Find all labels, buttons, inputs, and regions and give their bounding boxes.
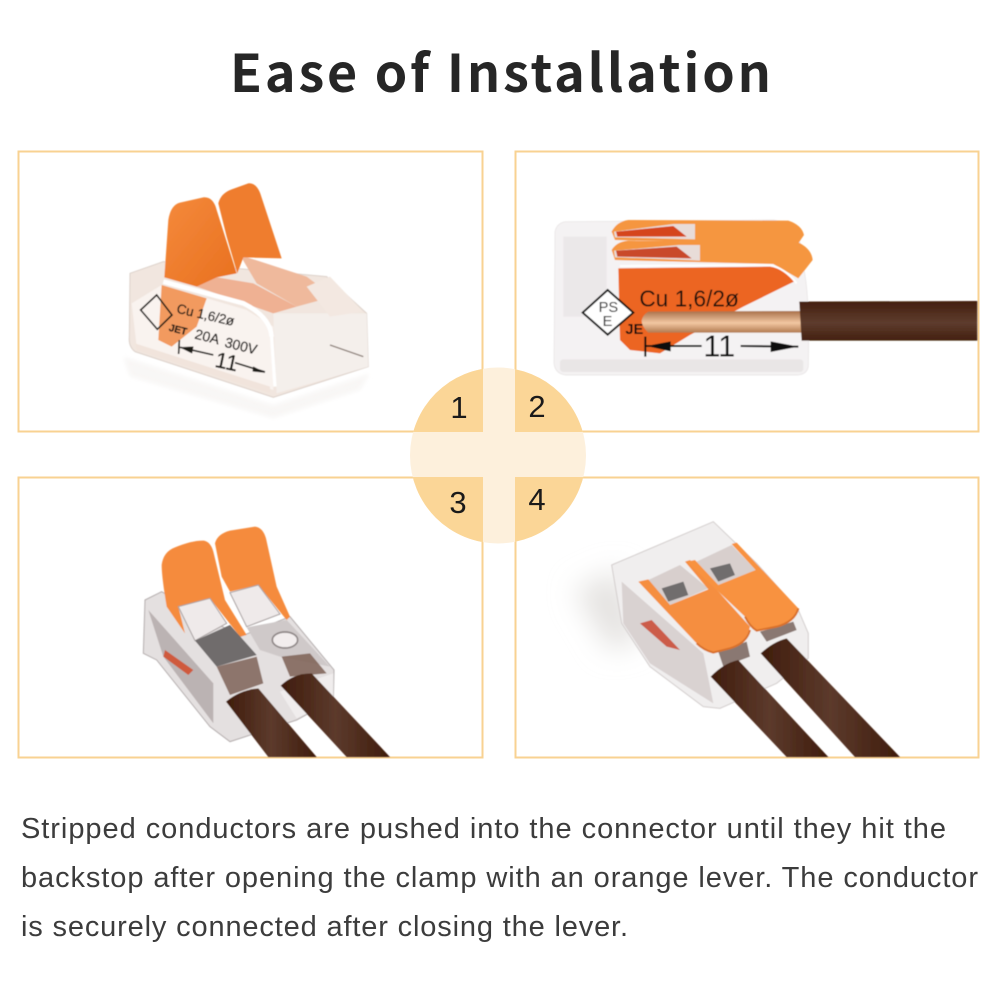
- icon: connector with two wires: [143, 527, 390, 757]
- step number 4: 4: [528, 482, 546, 517]
- connector markings: Cu 1,6/2ø: [175, 301, 236, 329]
- description text: [21, 813, 978, 943]
- panel 4: levers closed: [516, 478, 978, 758]
- connector markings: 11: [703, 330, 735, 364]
- panel 1: open connector: [18, 152, 482, 432]
- icon: right lever: [215, 527, 290, 620]
- connector markings: 11: [213, 347, 240, 376]
- connector markings: 300V: [223, 334, 259, 358]
- connector markings: 20A: [193, 326, 222, 347]
- step number 1: 1: [450, 390, 468, 425]
- connector markings: JE: [625, 322, 643, 338]
- icon: wires: [226, 688, 317, 757]
- description text: backstop after opening the clamp with an orange lever. The conductor: [21, 862, 978, 894]
- icon: left closed lever: [638, 560, 750, 653]
- icon: wires: [711, 660, 828, 757]
- icon: upper lever: [612, 220, 804, 243]
- connector markings: E: [603, 314, 613, 330]
- connector markings: JET: [168, 323, 188, 338]
- icon: right closed lever: [687, 543, 798, 631]
- icon: middle lever: [612, 241, 813, 278]
- icon: connector side view with wire: [554, 220, 977, 375]
- connector markings: Cu 1,6/2ø: [639, 286, 739, 312]
- icon: brown wire: [799, 301, 977, 341]
- connector markings: PS: [599, 300, 618, 316]
- step number 3: 3: [449, 485, 467, 520]
- connector markings: [583, 286, 798, 364]
- step number 2: 2: [528, 389, 546, 424]
- title: Ease of Installation: [230, 32, 771, 107]
- icon: connector with closed levers and wires: [612, 522, 900, 757]
- connector markings: [141, 295, 265, 376]
- number badge cross: [410, 368, 586, 544]
- description text: is securely connected after closing the lever.: [21, 911, 628, 943]
- panel 3: wires inserted with levers open: [18, 478, 482, 758]
- icon: front lever: [618, 267, 794, 353]
- icon: copper conductor: [642, 311, 802, 333]
- icon: left lever: [162, 541, 247, 637]
- decorative soft shadow: [575, 570, 640, 650]
- icon: connector with raised levers: [123, 183, 370, 418]
- icon: right lever: [218, 183, 282, 273]
- icon: left lever: [164, 197, 237, 287]
- panel 2: stripped conductor inserted: [516, 152, 978, 432]
- description text: Stripped conductors are pushed into the connector until they hit the: [21, 813, 946, 845]
